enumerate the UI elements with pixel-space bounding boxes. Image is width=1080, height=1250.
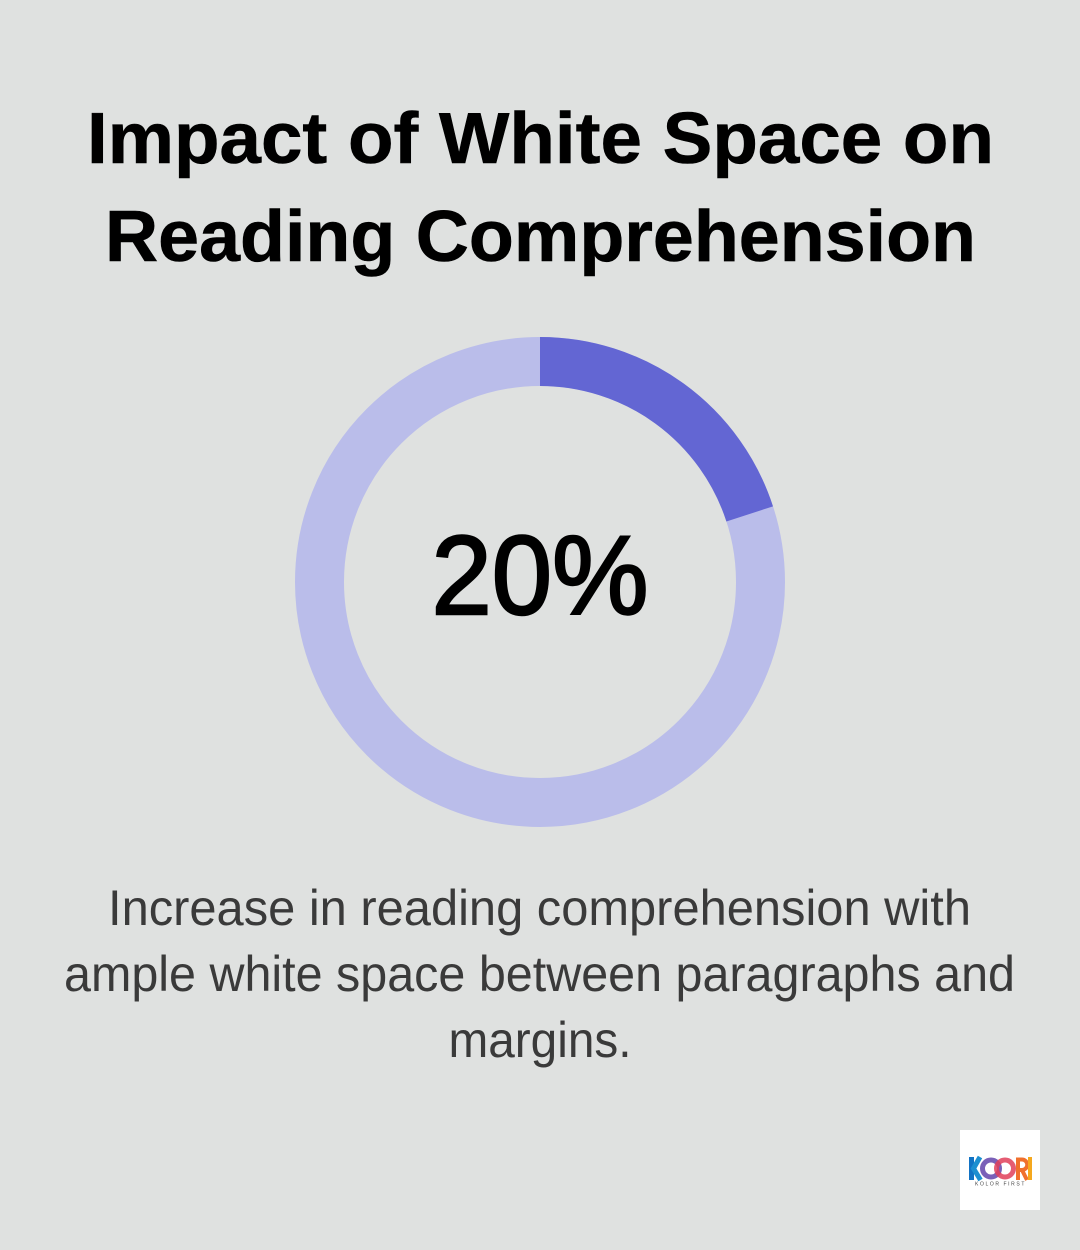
donut segment: 20% <box>540 362 750 514</box>
donut chart <box>320 362 760 802</box>
title: Impact of White Space on <box>87 99 994 179</box>
title <box>87 99 994 277</box>
logo letters <box>972 1157 1030 1180</box>
donut track <box>320 362 760 802</box>
donut value: 20% <box>432 513 648 638</box>
logo badge <box>960 1130 1040 1210</box>
description: ample white space between paragraphs and <box>64 946 1015 1002</box>
description <box>64 880 1015 1068</box>
description: Increase in reading comprehension with <box>108 880 971 936</box>
description: margins. <box>448 1012 632 1068</box>
logo tagline: KOLOR FIRST <box>975 1182 1026 1188</box>
title: Reading Comprehension <box>105 197 976 277</box>
